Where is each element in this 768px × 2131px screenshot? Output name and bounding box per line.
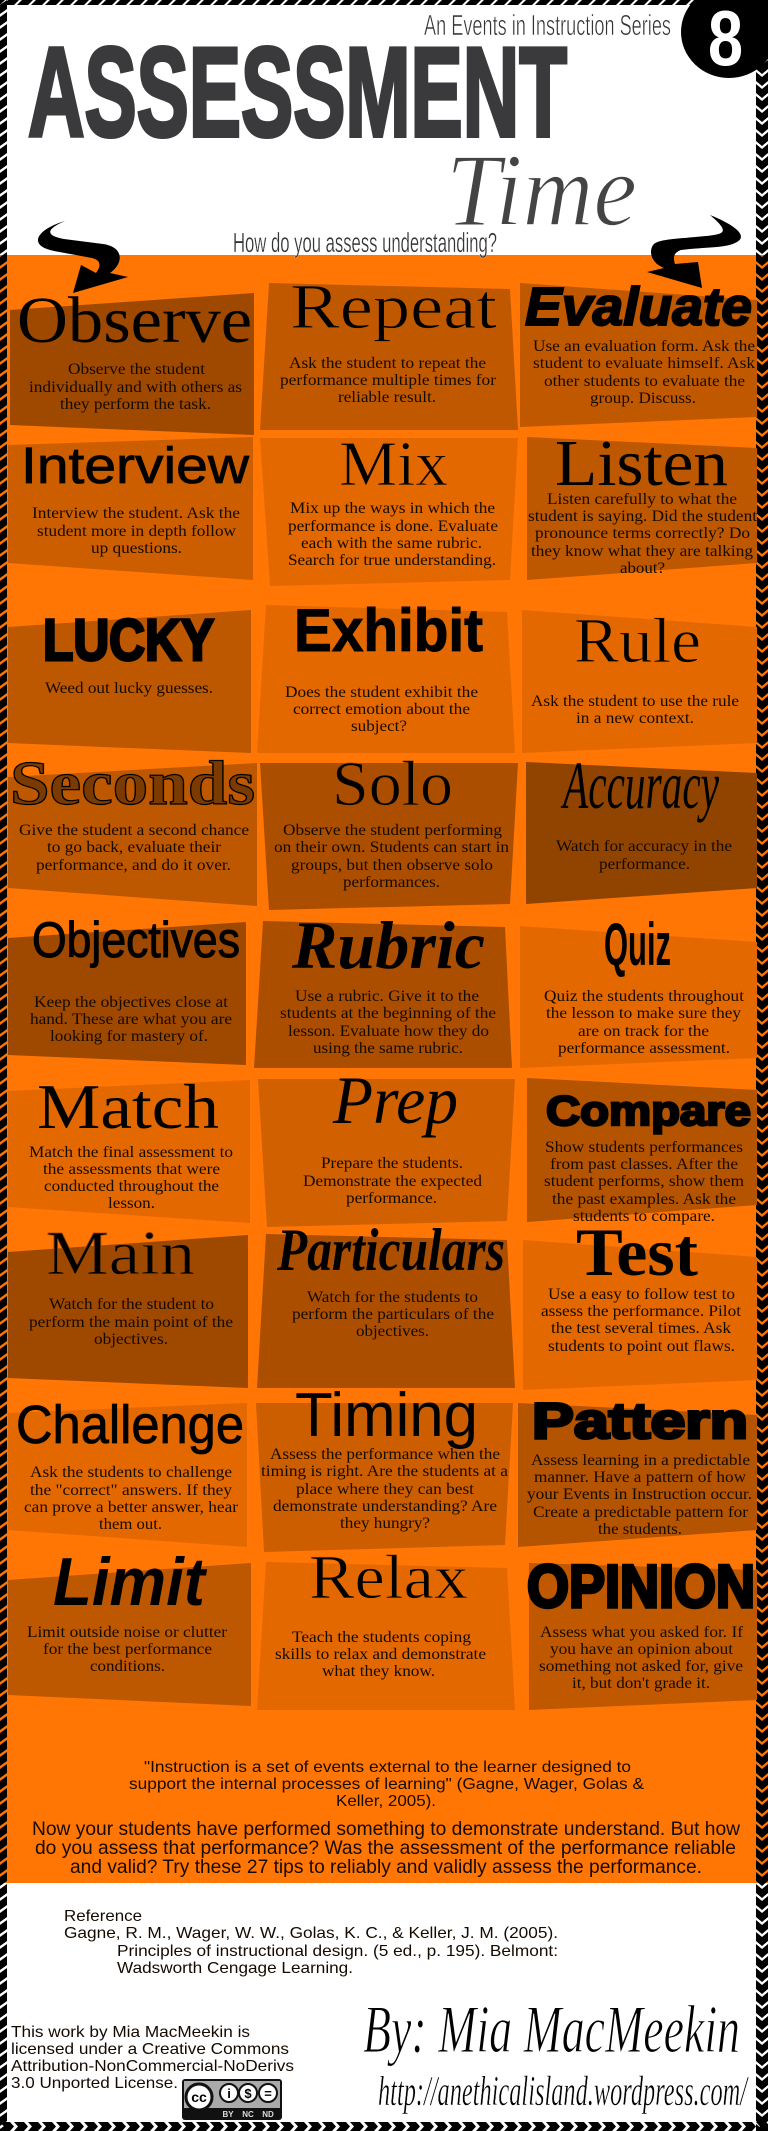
panel: rubric xyxy=(254,907,512,1068)
description: interview: up questions. xyxy=(91,538,182,557)
heading: Mix: Mix xyxy=(339,428,448,499)
description: accuracy xyxy=(556,836,732,873)
description: pattern: your Events in Instruction occur. xyxy=(527,1484,752,1503)
description: rubric: Use a rubric. Give it to the xyxy=(295,986,479,1005)
description: evaluate: Use an evaluation form. Ask the xyxy=(533,336,755,355)
icon: creative commons badge xyxy=(182,2079,282,2120)
description: accuracy: Watch for accuracy in the xyxy=(556,836,732,855)
description: timing: demonstrate understanding? Are xyxy=(273,1496,497,1515)
description: exhibit: Does the student exhibit the xyxy=(285,682,478,701)
heading: Exhibit: Exhibit xyxy=(294,597,483,664)
description: observe xyxy=(29,359,242,413)
description: rubric: lesson. Evaluate how they do xyxy=(288,1021,489,1040)
description: mix: Mix up the ways in which the xyxy=(290,498,495,517)
description: listen: Listen carefully to what the xyxy=(547,489,737,508)
panel: repeat xyxy=(260,271,518,430)
panel: match xyxy=(8,1071,250,1223)
heading: Limit: Limit xyxy=(53,1544,207,1620)
description: limit: for the best performance xyxy=(43,1639,212,1658)
description: observe: Observe the student xyxy=(68,359,206,378)
panel: relax xyxy=(257,1544,515,1710)
panel: prep xyxy=(258,1062,515,1227)
heading: Timing: Timing xyxy=(295,1381,478,1450)
left border xyxy=(0,0,7,2131)
icon: creative commons badge: $ xyxy=(244,2086,252,2101)
panel: solo xyxy=(260,748,518,910)
heading: Interview: Interview xyxy=(21,437,249,494)
title: Time: Time xyxy=(446,133,637,248)
panel: test xyxy=(523,1214,757,1390)
description: compare: Show students performances xyxy=(545,1137,743,1156)
description: objectives: Keep the objectives close at xyxy=(34,992,229,1011)
description: mix: each with the same rubric. xyxy=(301,533,482,552)
description: test: students to point out flaws. xyxy=(548,1336,735,1355)
description: interview: Interview the student. Ask the xyxy=(32,503,240,522)
description: quiz: the lesson to make sure they xyxy=(546,1003,742,1022)
description: test: assess the performance. Pilot xyxy=(541,1301,741,1320)
panel: evaluate xyxy=(520,277,757,427)
description: quiz: performance assessment. xyxy=(558,1038,730,1057)
description: quiz: are on track for the xyxy=(578,1021,709,1040)
description: opinion: Assess what you asked for. If xyxy=(540,1622,744,1641)
description: listen: they know what they are talking xyxy=(531,541,753,560)
description: match: the assessments that were xyxy=(43,1159,220,1178)
description: match: conducted throughout the xyxy=(44,1176,219,1195)
description: observe: individually and with others as xyxy=(29,377,242,396)
description: exhibit: correct emotion about the xyxy=(293,699,470,718)
reference: Wadsworth Cengage Learning. xyxy=(117,1960,353,1977)
reference: Principles of instructional design. (5 ed., p. 195). Belmont: xyxy=(117,1943,558,1960)
heading: Pattern: Pattern xyxy=(532,1393,748,1449)
description: opinion: something not asked for, give xyxy=(539,1656,743,1675)
description: relax: Teach the students coping xyxy=(292,1627,471,1646)
heading: Quiz: Quiz xyxy=(604,911,671,978)
description: exhibit: subject? xyxy=(351,716,407,735)
description: timing: they hungry? xyxy=(340,1513,430,1532)
reference xyxy=(64,1908,558,1977)
description: compare xyxy=(544,1137,744,1225)
panel: opinion xyxy=(527,1553,757,1710)
description: main: objectives. xyxy=(94,1329,168,1348)
description: relax: skills to relax and demonstrate xyxy=(275,1644,486,1663)
description: relax xyxy=(275,1627,486,1680)
arrow: left xyxy=(38,221,128,293)
license text: Attribution-NonCommercial-NoDerivs xyxy=(11,2058,294,2075)
heading: Listen: Listen xyxy=(555,427,728,500)
introduction paragraph: do you assess that performance? Was the assessment of the performance reliable xyxy=(35,1837,736,1859)
panel: mix xyxy=(260,428,518,586)
description: main: Watch for the student to xyxy=(49,1294,214,1313)
heading: Rubric: Rubric xyxy=(291,907,485,983)
description: seconds xyxy=(19,820,249,874)
description: solo: on their own. Students can start in xyxy=(274,837,509,856)
heading: Particulars: Particulars xyxy=(276,1217,505,1283)
icon: creative commons badge: = xyxy=(264,2086,272,2101)
description: match xyxy=(29,1142,233,1212)
description: quiz xyxy=(544,986,744,1057)
panel: seconds xyxy=(8,750,257,906)
description: test xyxy=(541,1284,741,1355)
heading: Objectives: Objectives xyxy=(32,912,240,968)
description: repeat: Ask the student to repeat the xyxy=(289,353,486,372)
license text: This work by Mia MacMeekin is xyxy=(11,2024,250,2041)
panel: lucky xyxy=(8,608,251,753)
description: match: lesson. xyxy=(108,1193,155,1212)
description: pattern: manner. Have a pattern of how xyxy=(534,1467,746,1486)
description: repeat xyxy=(280,353,497,406)
license text: licensed under a Creative Commons xyxy=(11,2041,289,2058)
description: test: the test several times. Ask xyxy=(551,1318,732,1337)
introduction paragraph: and valid? Try these 27 tips to reliably and validly assess the performance. xyxy=(70,1856,702,1878)
description: objectives xyxy=(30,992,232,1045)
description: challenge: Ask the students to challenge xyxy=(30,1462,232,1481)
heading: Prep: Prep xyxy=(332,1062,458,1138)
reference: Gagne, R. M., Wager, W. W., Golas, K. C., & Keller, J. M. (2005). xyxy=(64,1925,558,1942)
heading: Test: Test xyxy=(576,1214,698,1290)
panel: limit xyxy=(8,1544,251,1706)
subtitle question: How do you assess understanding? xyxy=(233,227,497,258)
description: compare: students to compare. xyxy=(573,1206,715,1225)
description: opinion xyxy=(539,1622,744,1692)
quote xyxy=(129,1759,644,1810)
description: challenge xyxy=(24,1462,239,1533)
heading: Compare: Compare xyxy=(546,1087,751,1134)
description: objectives: looking for mastery of. xyxy=(50,1026,208,1045)
top border xyxy=(0,0,768,5)
panel: compare xyxy=(527,1078,757,1225)
description: opinion: you have an opinion about xyxy=(550,1639,733,1658)
description: repeat: performance multiple times for xyxy=(280,370,497,389)
number badge xyxy=(681,0,768,82)
heading: Seconds: Seconds xyxy=(10,750,255,818)
description: solo: performances. xyxy=(343,872,440,891)
description: limit: Limit outside noise or clutter xyxy=(27,1622,228,1641)
description: mix xyxy=(288,498,498,569)
description: limit xyxy=(27,1622,228,1675)
description: challenge: can prove a better answer, hear xyxy=(24,1497,239,1516)
panel: main xyxy=(8,1220,248,1388)
description: exhibit xyxy=(285,682,478,735)
panel: interview xyxy=(8,437,253,580)
description: particulars: objectives. xyxy=(356,1321,429,1340)
description: main: perform the main point of the xyxy=(29,1312,233,1331)
description: particulars: perform the particulars of the xyxy=(292,1304,494,1323)
description: seconds: performance, and do it over. xyxy=(36,855,231,874)
description: pattern: Assess learning in a predictable xyxy=(531,1450,750,1469)
orange background band xyxy=(0,255,768,1883)
introduction paragraph: Now your students have performed something to demonstrate understand. But how xyxy=(32,1818,741,1840)
panel: timing xyxy=(256,1381,513,1552)
description: rule: in a new context. xyxy=(576,708,694,727)
description: challenge: the "correct" answers. If they xyxy=(30,1480,233,1499)
description: particulars: Watch for the students to xyxy=(307,1287,478,1306)
description: challenge: them out. xyxy=(99,1514,162,1533)
heading: Rule: Rule xyxy=(574,605,701,676)
bottom border xyxy=(0,2122,768,2131)
heading: Relax: Relax xyxy=(309,1544,468,1612)
description: timing: Assess the performance when the xyxy=(270,1444,500,1463)
icon: creative commons badge: ND xyxy=(262,2110,274,2119)
description: pattern: the students. xyxy=(598,1519,682,1538)
description: compare: student performs, show them xyxy=(544,1171,744,1190)
description: evaluate: other students to evaluate the xyxy=(544,371,745,390)
description: prep: Demonstrate the expected xyxy=(303,1171,482,1190)
description: evaluate: group. Discuss. xyxy=(590,388,696,407)
description: solo: groups, but then observe solo xyxy=(291,855,493,874)
description: compare: the past examples. Ask the xyxy=(552,1189,736,1208)
description: compare: from past classes. After the xyxy=(550,1154,738,1173)
description: test: Use a easy to follow test to xyxy=(548,1284,735,1303)
reference: Reference xyxy=(64,1908,142,1925)
description: rubric xyxy=(280,986,496,1057)
description: pattern xyxy=(527,1450,752,1538)
description: opinion: it, but don't grade it. xyxy=(572,1673,710,1692)
description: seconds: Give the student a second chance xyxy=(19,820,249,839)
heading: Challenge: Challenge xyxy=(16,1395,244,1455)
description: seconds: to go back, evaluate their xyxy=(47,837,222,856)
heading: Lucky: LUCKY xyxy=(43,608,214,673)
panel: observe xyxy=(10,284,254,435)
quote: Keller, 2005). xyxy=(336,1793,436,1810)
panel: challenge xyxy=(8,1395,247,1547)
description: listen: student is saying. Did the student xyxy=(528,506,757,525)
description: timing xyxy=(261,1444,508,1532)
description: listen: pronounce terms correctly? Do xyxy=(535,523,750,542)
description: interview xyxy=(32,503,240,557)
description: pattern: Create a predictable pattern for xyxy=(533,1502,749,1521)
description: lucky: Weed out lucky guesses. xyxy=(45,678,213,697)
description: mix: performance is done. Evaluate xyxy=(288,516,498,535)
description: listen: about? xyxy=(620,558,665,577)
icon: creative commons badge: BY xyxy=(222,2110,234,2119)
description: rubric: using the same rubric. xyxy=(313,1038,463,1057)
panel: objectives xyxy=(8,912,246,1065)
heading: Repeat: Repeat xyxy=(290,271,497,342)
panel: accuracy xyxy=(526,747,757,904)
description: prep: Prepare the students. xyxy=(321,1153,463,1172)
panel: listen xyxy=(527,427,757,580)
description: prep xyxy=(303,1153,482,1207)
description: rule xyxy=(531,691,739,727)
description: relax: what they know. xyxy=(322,1661,435,1680)
description: objectives: hand. These are what you are xyxy=(30,1009,232,1028)
heading: Observe: Observe xyxy=(17,284,252,357)
description: rubric: students at the beginning of the xyxy=(280,1003,496,1022)
license text xyxy=(11,2024,294,2092)
description: timing: place where they can best xyxy=(296,1479,475,1498)
panel: pattern xyxy=(518,1393,757,1547)
description: solo: Observe the student performing xyxy=(283,820,502,839)
description: evaluate xyxy=(533,336,756,407)
description: rule: Ask the student to use the rule xyxy=(531,691,739,710)
description: prep: performance. xyxy=(346,1188,437,1207)
icon: creative commons badge: cc xyxy=(191,2089,207,2105)
panel: particulars xyxy=(257,1217,515,1388)
panel: exhibit xyxy=(257,597,515,753)
description: interview: student more in depth follow xyxy=(37,521,236,540)
heading: Match: Match xyxy=(37,1071,219,1142)
description: accuracy: performance. xyxy=(599,854,690,873)
description: evaluate: student to evaluate himself. Ask xyxy=(533,353,756,372)
heading: Solo: Solo xyxy=(332,748,453,819)
description: observe: they perform the task. xyxy=(60,394,211,413)
heading: Evaluate: Evaluate xyxy=(525,277,752,337)
description: timing: timing is right. Are the students at a xyxy=(261,1461,508,1480)
icon: creative commons badge: i xyxy=(227,2086,231,2101)
quote: "Instruction is a set of events external to the learner designed to xyxy=(144,1759,631,1776)
description: solo xyxy=(274,820,509,891)
description: listen xyxy=(528,489,757,577)
icon: creative commons badge: NC xyxy=(242,2110,254,2119)
heading: Main: Main xyxy=(46,1220,195,1288)
introduction paragraph xyxy=(32,1818,741,1878)
panel: rule xyxy=(522,605,757,753)
description: main xyxy=(29,1294,233,1348)
right border xyxy=(756,0,768,2131)
description: limit: conditions. xyxy=(90,1656,165,1675)
panel: quiz xyxy=(520,911,757,1068)
description: match: Match the final assessment to xyxy=(29,1142,233,1161)
description: repeat: reliable result. xyxy=(338,387,436,406)
license text: 3.0 Unported License. xyxy=(11,2075,178,2092)
description: particulars xyxy=(292,1287,494,1340)
description: quiz: Quiz the students throughout xyxy=(544,986,744,1005)
description: mix: Search for true understanding. xyxy=(288,550,496,569)
quote: support the internal processes of learning" (Gagne, Wager, Golas & xyxy=(129,1776,644,1793)
arrow: right xyxy=(647,215,741,288)
